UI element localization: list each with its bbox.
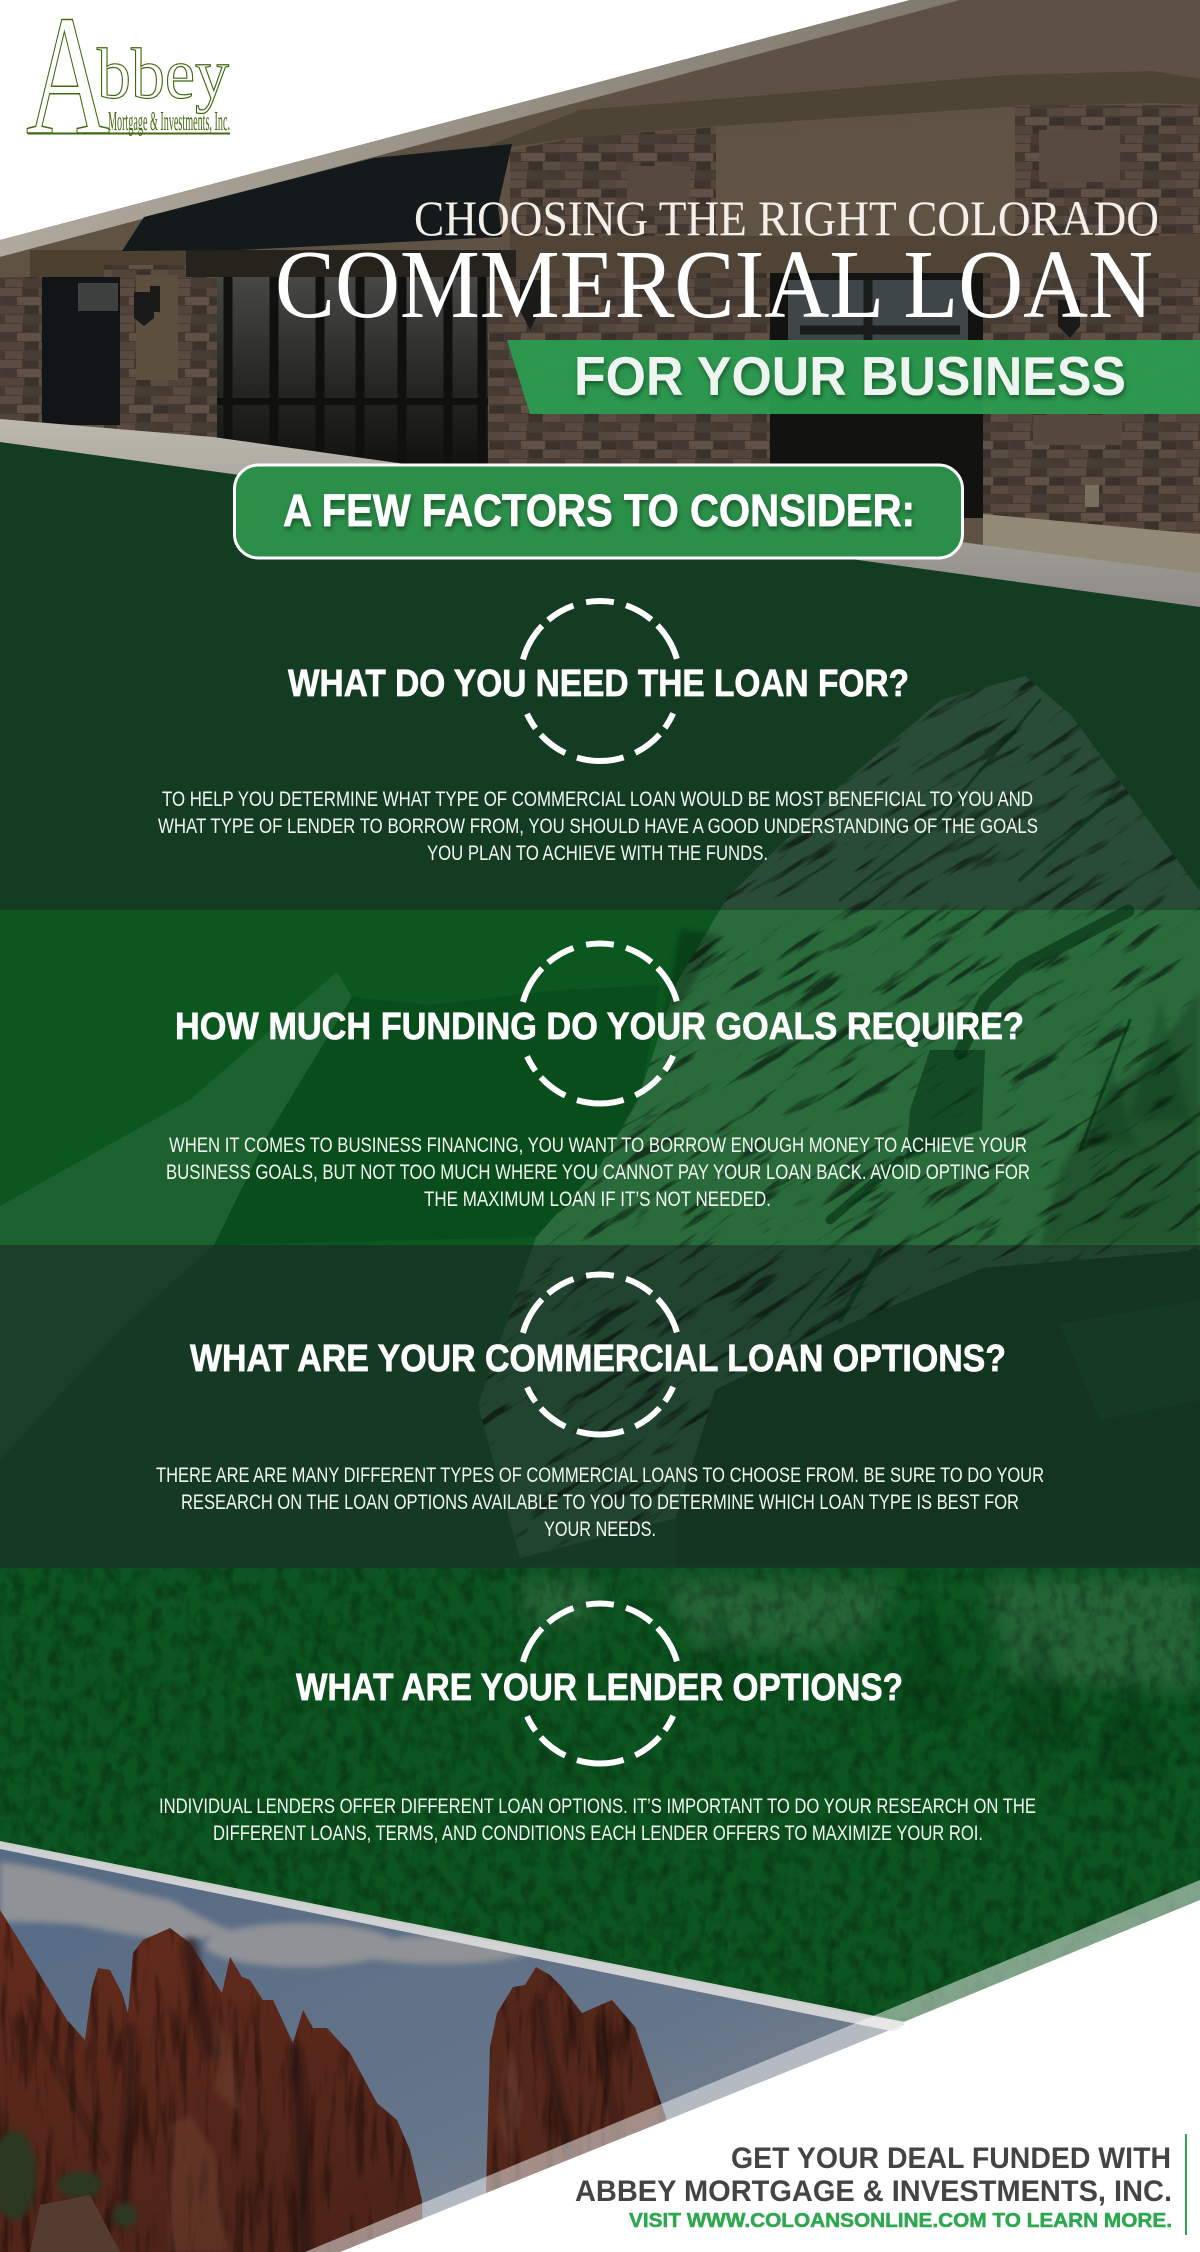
shrubs — [0, 2130, 137, 2227]
tree silhouettes — [690, 1000, 1190, 1780]
factor 3 text: YOUR NEEDS. — [544, 1518, 656, 1541]
factor 4 text: DIFFERENT LOANS, TERMS, AND CONDITIONS EACH LENDER OFFERS TO MAXIMIZE YOUR ROI. — [213, 1822, 983, 1845]
factor 3 heading: WHAT ARE YOUR COMMERCIAL LOAN OPTIONS? — [190, 1338, 1006, 1380]
dashed circle 4 — [507, 1591, 693, 1776]
awning — [122, 144, 512, 251]
dashed circle 2 — [507, 931, 693, 1116]
inset panels — [627, 166, 690, 206]
footer rule — [1185, 2134, 1187, 2235]
upper wall right — [957, 0, 960, 1]
rock texture — [0, 1900, 430, 2252]
factor 2 — [166, 931, 1030, 1211]
lower stone — [0, 277, 42, 427]
panel: green factor sections with mountain photo — [0, 442, 1200, 2023]
mountain: forest between rocks — [214, 985, 660, 1245]
footer link: VISIT WWW.COLOANSONLINE.COM TO LEARN MORE. — [629, 2210, 1172, 2232]
fascia band — [490, 71, 1200, 150]
banner shape — [507, 340, 1200, 414]
rubble — [30, 2195, 120, 2252]
factor 3 — [156, 1262, 1044, 1541]
title — [275, 190, 1159, 338]
mountain: dark trees at top of rock — [665, 930, 720, 1020]
band 2 — [0, 910, 1200, 1245]
factor 4 — [159, 1591, 1036, 1845]
diagonal light stripe above photo — [0, 1841, 905, 2032]
band above big window — [186, 250, 516, 277]
left door — [42, 277, 120, 425]
factor 1 text: YOU PLAN TO ACHIEVE WITH THE FUNDS. — [427, 842, 768, 865]
mountain: main flatiron — [450, 660, 1200, 1568]
mountain: dark blot — [906, 1050, 985, 1160]
horizontal band — [510, 236, 1200, 273]
dashed circle 1 — [507, 588, 693, 774]
mountain: rock streak texture — [480, 680, 1200, 1546]
factor 1 text — [158, 788, 1038, 865]
right spire texture — [480, 1960, 680, 2210]
rock highlights — [170, 2010, 522, 2252]
dashed circle 3 — [507, 1262, 693, 1447]
clouds — [0, 1862, 530, 1967]
callout box — [234, 465, 962, 558]
mountain: rock patches among band 4 trees — [517, 1575, 1200, 1690]
mountain: second slab — [0, 972, 352, 1245]
photo: commercial building — [0, 0, 1200, 620]
factor 1 heading: WHAT DO YOU NEED THE LOAN FOR? — [288, 663, 909, 705]
band 1 — [0, 430, 1200, 910]
footer line 2: ABBEY MORTGAGE & INVESTMENTS, INC. — [575, 2175, 1172, 2208]
upper stone piers — [510, 127, 716, 240]
factor 2 text — [166, 1134, 1030, 1211]
factor 4 heading: WHAT ARE YOUR LENDER OPTIONS? — [296, 1667, 903, 1709]
mountain: trees right of rock — [1040, 990, 1200, 1245]
front door — [770, 273, 983, 518]
light wall base — [983, 514, 1200, 575]
translucent stripe along white corner — [305, 1880, 1200, 2252]
factor 2 heading: HOW MUCH FUNDING DO YOUR GOALS REQUIRE? — [175, 1006, 1024, 1048]
factor 3 text — [156, 1464, 1044, 1541]
wall lamps — [134, 286, 160, 326]
photo: red rock formations and sky — [0, 1840, 910, 2252]
footer call to action — [575, 2134, 1187, 2235]
white corner panel — [377, 1900, 1200, 2252]
logo letters bbey: bbey — [97, 34, 229, 114]
big window — [217, 277, 488, 465]
callout text: A FEW FACTORS TO CONSIDER: — [283, 485, 915, 536]
factor 2 text: THE MAXIMUM LOAN IF IT’S NOT NEEDED. — [424, 1188, 771, 1211]
rock: left masses and main mass — [0, 1900, 430, 2252]
factor 1 — [158, 588, 1038, 865]
sidewalk — [0, 419, 1200, 620]
logo rule — [28, 132, 230, 134]
center stucco panel — [716, 115, 1015, 240]
rock shading — [30, 1945, 620, 2252]
mountain: forest in band 3 — [676, 1250, 1200, 1568]
title line 2: COMMERCIAL LOAN — [275, 231, 1153, 338]
band 3 — [0, 1245, 1200, 1568]
footer line 1: GET YOUR DEAL FUNDED WITH — [731, 2142, 1171, 2175]
banner text: FOR YOUR BUSINESS — [574, 345, 1126, 407]
rock: right spire — [486, 1967, 668, 2200]
left stucco band — [0, 250, 26, 257]
band 4 — [0, 1568, 1200, 2068]
callout: factors box — [234, 465, 962, 558]
green banner — [507, 340, 1200, 414]
logo — [26, 0, 230, 171]
forest texture — [0, 1568, 1200, 2098]
text: Mortgage & Investments, Inc. — [108, 106, 230, 136]
roof edge strip — [0, 0, 960, 257]
factor 4 text — [159, 1795, 1036, 1845]
mountain: dark crevices — [790, 700, 1130, 1330]
